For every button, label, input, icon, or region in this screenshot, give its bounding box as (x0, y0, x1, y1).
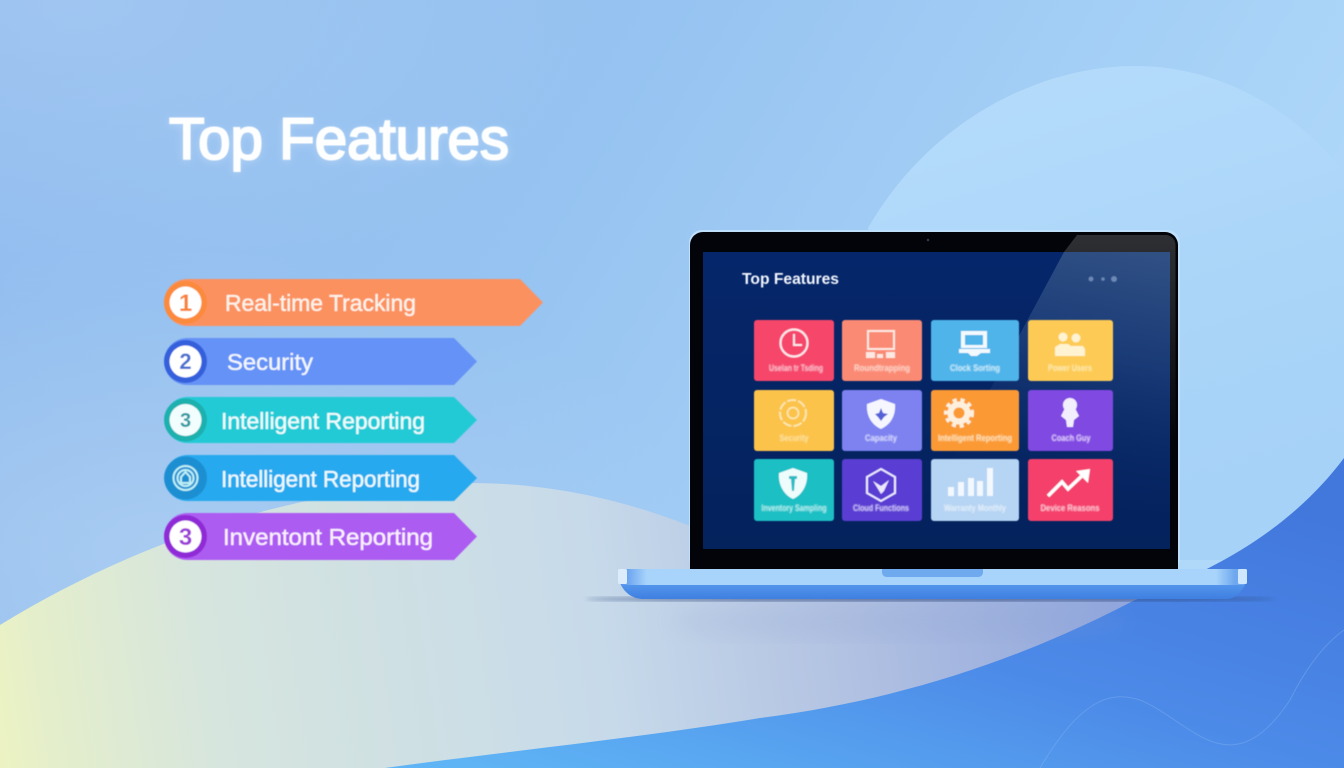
feature 2: Security: 2 (179, 349, 192, 374)
card: gear: Intelligent Reporting (938, 433, 1012, 443)
card: shield teal: Inventory Sampling (762, 503, 826, 513)
icon: concentric ring (174, 466, 198, 490)
title: Top Features (169, 107, 509, 172)
title: Top Features (168, 109, 510, 174)
card: tracking: Uselan tr Tsding (769, 363, 823, 373)
laptop (585, 230, 1275, 640)
card: target (754, 390, 834, 451)
feature 4: Intelligent Reporting: Intelligent Reporting (221, 466, 420, 492)
laptop lid (689, 230, 1180, 571)
feature list (164, 279, 543, 560)
feature 2: Security (164, 338, 477, 385)
card: tracking (754, 320, 834, 381)
feature 3: Intelligent Reporting: 3 (180, 410, 191, 432)
laptop screen (703, 252, 1170, 549)
background blue wave (385, 458, 1344, 768)
screen heading: Top Features (742, 271, 839, 288)
card: bulb (1028, 390, 1113, 451)
card: shield (842, 390, 922, 451)
card: trend (1028, 459, 1113, 521)
feature 3: Intelligent Reporting (164, 397, 477, 443)
card: monitor (842, 320, 922, 381)
feature 5: Inventont Reporting: 3 (179, 524, 192, 551)
card: bars: Warranty Monthly (944, 503, 1006, 513)
card: trend: Device Reasons (1040, 503, 1100, 513)
card: shield teal (754, 459, 834, 521)
laptop base (618, 569, 1247, 599)
background pale wave (0, 483, 1150, 768)
feature 2: Security: Security (227, 349, 314, 375)
card: cube (842, 459, 922, 521)
feature 1: Real-time Tracking: 1 (179, 290, 192, 317)
feature 5: Inventont Reporting (164, 513, 477, 560)
feature 1: Real-time Tracking: Real-time Tracking (225, 290, 416, 316)
trackpad notch (882, 569, 983, 577)
feature 5: Inventont Reporting: Inventont Reporting (223, 524, 433, 550)
screen dots (1088, 276, 1117, 282)
card: gear (931, 390, 1019, 451)
card: shield: Capacity (865, 433, 897, 443)
card: cube: Cloud Functions (853, 503, 909, 513)
card: laptop: Clock Sorting (950, 363, 1000, 373)
card: bars (931, 459, 1019, 521)
feature card grid (754, 320, 1113, 521)
card: monitor: Roundtrapping (854, 363, 910, 373)
card: target: Security (780, 433, 808, 443)
card: people (1028, 320, 1113, 381)
card: people: Power Users (1048, 363, 1092, 373)
feature 1: Real-time Tracking (164, 279, 543, 326)
card: bulb: Coach Guy (1052, 433, 1090, 443)
background circle (868, 66, 1344, 560)
feature 4: Intelligent Reporting (164, 455, 477, 501)
card: laptop (931, 320, 1019, 381)
laptop shadow (585, 596, 1275, 602)
feature 3: Intelligent Reporting: Intelligent Reporting (221, 408, 425, 434)
